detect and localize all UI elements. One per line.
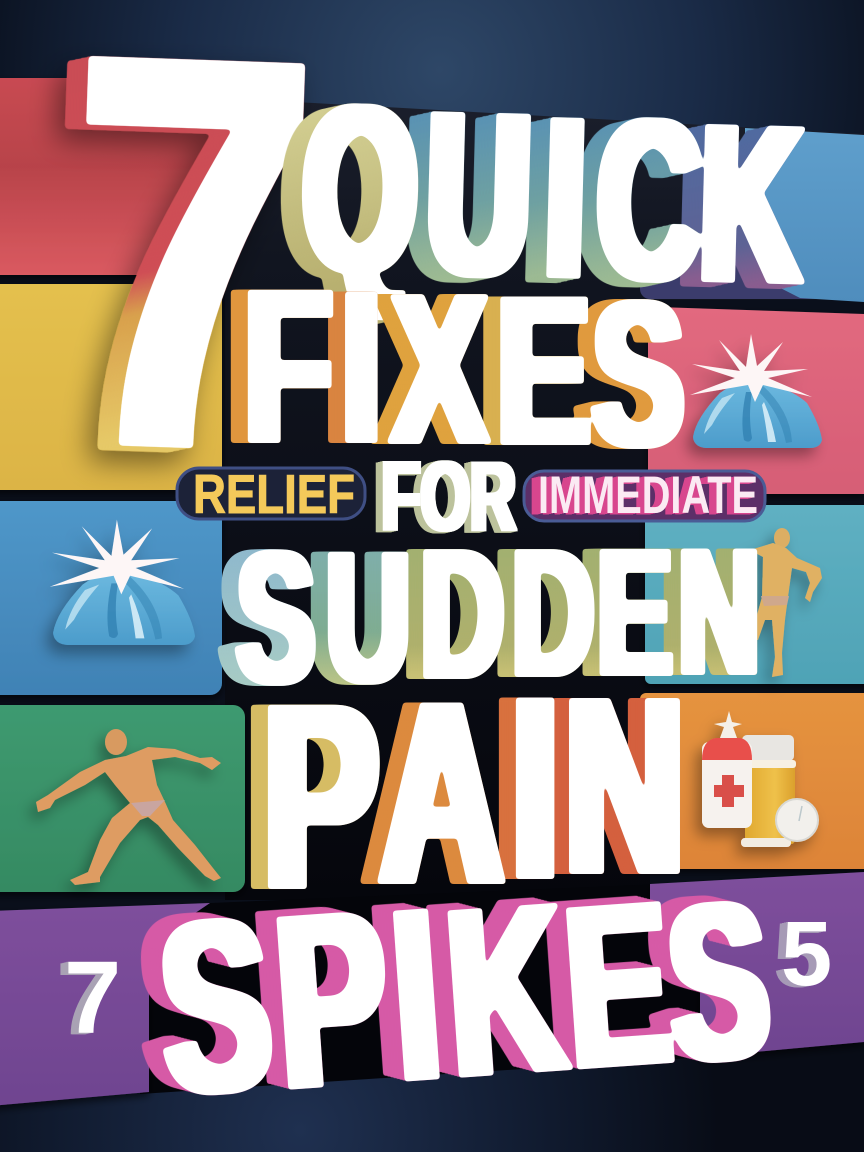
heading word: FIXES: S (592, 259, 684, 490)
heading word: SUDDEN: S (236, 514, 315, 723)
heading word: SUDDEN: D (420, 512, 504, 716)
heading word: SUDDEN: D (512, 513, 594, 713)
icon: ice pack left (50, 520, 195, 645)
icon: ice pack right (690, 334, 822, 448)
heading word: SPIKES: S (152, 866, 279, 1146)
heading word: FOR: FOR (382, 441, 516, 551)
heading word: FIXES: S (592, 259, 684, 490)
heading word: SPIKES: K (439, 853, 572, 1127)
panel: top right blue (745, 128, 864, 302)
heading word: FIXES: I (342, 247, 381, 487)
heading word: PAIN: A (380, 649, 503, 937)
heading word: QUICK: I (543, 70, 588, 326)
heading word: PAIN: P (263, 651, 379, 944)
heading word: QUICK: C (595, 72, 703, 329)
heading word: SPIKES: I (384, 857, 448, 1132)
heading word: PAIN: P (263, 651, 379, 944)
heading word: QUICK: K (697, 78, 804, 331)
heading word: SUDDEN: D (512, 513, 594, 713)
panel: left blue (0, 501, 222, 695)
heading word: SPIKES: S (152, 866, 279, 1146)
panel: red (0, 78, 228, 275)
pill: IMMEDIATE: IMMEDIATE (536, 466, 758, 525)
heading word: SPIKES: E (558, 854, 678, 1117)
heading word: QUICK: Q (300, 54, 421, 323)
icon: medicine bottles (702, 711, 818, 847)
small numeral 7: 7 (64, 940, 121, 1055)
panel: dark centre wall (225, 98, 864, 900)
heading word: SUDDEN (236, 512, 760, 723)
pill: RELIEF: RELIEF (193, 463, 355, 525)
heading word: FIXES: E (497, 252, 590, 488)
icon: standing figure (750, 528, 822, 677)
heading word: SPIKES: S (661, 854, 776, 1109)
heading word: FIXES: X (392, 251, 487, 488)
panel: yellow (0, 284, 222, 490)
heading word: SUDDEN: S (236, 514, 315, 723)
heading word: SUDDEN: E (597, 512, 673, 712)
heading word: FIXES: F (244, 246, 333, 488)
heading word: SPIKES: E (558, 854, 678, 1117)
heading word: SUDDEN: E (597, 512, 673, 712)
panel: green (0, 705, 245, 892)
panel: dark purple strip under KICK (640, 262, 830, 299)
heading word: SUDDEN: U (326, 514, 411, 720)
heading word: FOR: FOR (382, 441, 516, 551)
heading word: FIXES: I (342, 247, 381, 487)
heading word: PAIN: I (512, 644, 559, 932)
heading word: QUICK: K (697, 78, 804, 331)
heading word: QUICK: I (543, 70, 588, 326)
panel: purple band left (0, 903, 210, 1106)
small numeral 5: 5 (780, 903, 831, 1005)
panel: orange (640, 693, 864, 869)
heading word: FIXES: F (244, 246, 333, 488)
panel: black wall behind SPIKES (140, 884, 720, 1094)
heading word: PAIN: N (565, 645, 684, 925)
heading word: SUDDEN: U (326, 514, 411, 720)
heading word: SPIKES: P (268, 860, 396, 1141)
heading word: QUICK: U (424, 62, 534, 325)
heading word: SPIKES: K (439, 853, 572, 1127)
heading word: FIXES (244, 246, 684, 490)
small numeral 7: 7 (63, 940, 120, 1055)
heading word: QUICK: Q (300, 54, 421, 323)
heading word: SPIKES: S (661, 854, 776, 1109)
heading word: SPIKES: I (384, 857, 448, 1132)
icon: lunging figure (36, 729, 221, 885)
panel: teal (645, 505, 864, 684)
heading word: FIXES: X (392, 251, 487, 488)
panel: pink (648, 307, 864, 494)
heading word: FIXES: E (497, 252, 590, 488)
heading word: SPIKES: P (268, 860, 396, 1141)
heading word: SUDDEN: D (420, 512, 504, 716)
heading word: SUDDEN: N (678, 512, 760, 711)
pill: IMMEDIATE: IMMEDIATE (538, 466, 758, 525)
heading word: QUICK: U (424, 62, 534, 325)
heading word: QUICK: C (595, 72, 703, 329)
heading word: PAIN: A (380, 649, 503, 937)
heading word: PAIN: I (512, 644, 559, 932)
panel: purple band right (650, 872, 864, 1057)
heading word: QUICK (300, 54, 805, 333)
heading word: PAIN: N (565, 645, 684, 925)
heading word: PAIN (263, 644, 684, 944)
heading word: SPIKES (152, 831, 777, 1149)
small numeral 5: 5 (781, 903, 832, 1005)
heading word: SUDDEN: N (678, 512, 760, 711)
